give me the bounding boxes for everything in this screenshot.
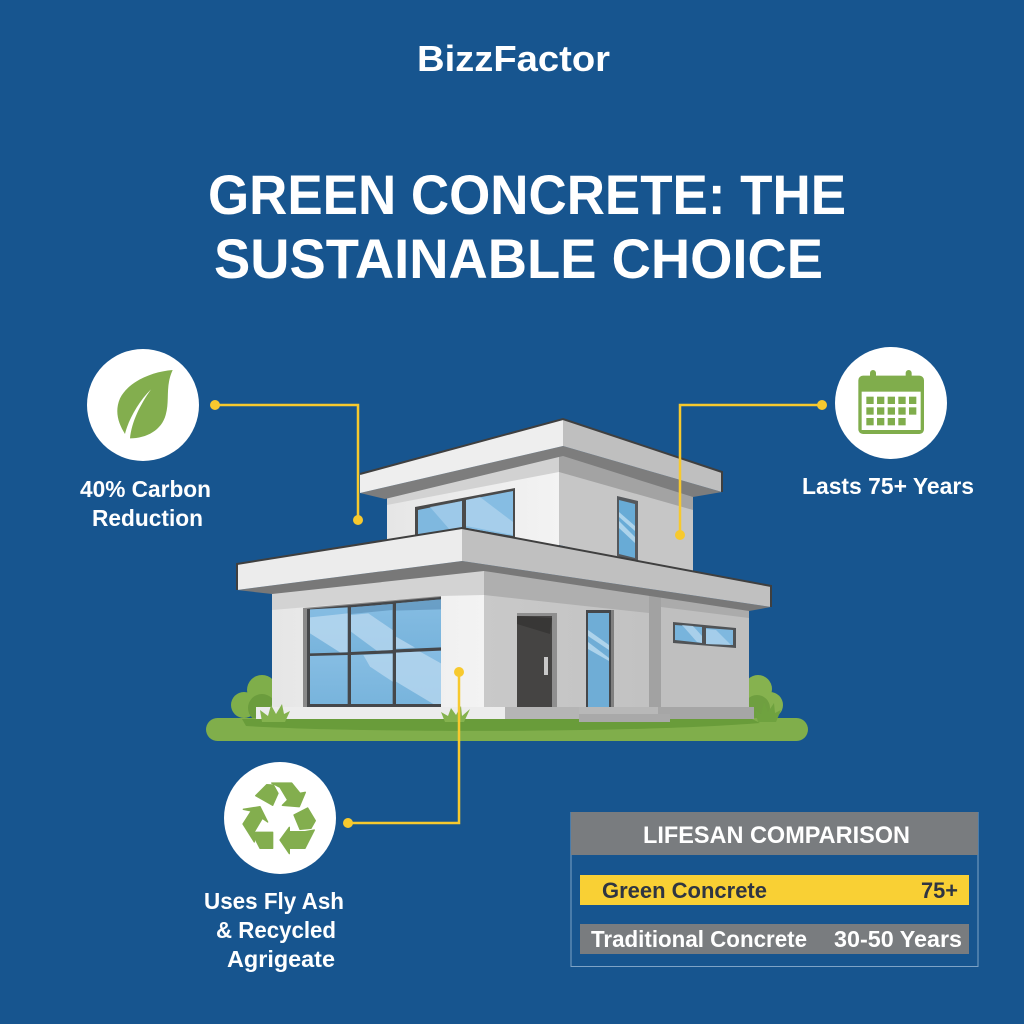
brand logo: BizzFactor xyxy=(417,38,610,79)
large front window xyxy=(303,596,441,707)
label: recycled materials: & Recycled xyxy=(216,917,336,943)
upper left window xyxy=(415,488,515,540)
window panes xyxy=(310,599,441,704)
lower storey walls xyxy=(272,569,749,708)
window reflections xyxy=(310,613,441,704)
grass tufts xyxy=(260,702,781,722)
label: carbon reduction: 40% Carbon xyxy=(80,476,211,502)
callout connector: lifespan xyxy=(675,400,827,540)
tall window xyxy=(586,610,614,708)
callout connector: recycled xyxy=(343,667,464,828)
row: green concrete xyxy=(580,875,969,905)
title xyxy=(208,163,846,290)
front door xyxy=(517,613,557,708)
ground and bushes xyxy=(206,675,808,741)
row: green concrete: 75+ xyxy=(921,878,958,903)
lower roof xyxy=(237,528,771,611)
panel: lifespan comparison xyxy=(571,812,978,966)
small side window xyxy=(673,622,736,648)
label: carbon reduction xyxy=(80,476,211,531)
row: green concrete: Green Concrete xyxy=(602,878,767,903)
callout connector: carbon xyxy=(210,400,363,525)
house illustration xyxy=(206,419,808,741)
panel header xyxy=(571,812,978,855)
label: carbon reduction: Reduction xyxy=(92,505,203,531)
plinth and steps xyxy=(256,707,754,722)
title: GREEN CONCRETE: THE xyxy=(208,163,846,226)
title: SUSTAINABLE CHOICE xyxy=(214,227,823,290)
row: traditional concrete xyxy=(580,924,969,954)
upper right window xyxy=(617,496,638,562)
row: traditional concrete: Traditional Concrete xyxy=(591,926,807,952)
window top shade xyxy=(351,599,441,614)
label: recycled materials: Uses Fly Ash xyxy=(204,888,344,914)
upper storey walls xyxy=(387,448,693,575)
icon: calendar xyxy=(835,347,947,459)
label: recycled materials: Agrigeate xyxy=(227,946,335,972)
row: traditional concrete: 30-50 Years xyxy=(834,926,962,952)
label: lifespan: Lasts 75+ Years xyxy=(802,473,974,499)
icon: recycle xyxy=(224,762,336,874)
panel header: LIFESAN COMPARISON xyxy=(643,822,910,849)
icon: leaf xyxy=(87,349,199,461)
upper roof xyxy=(360,419,722,499)
label: recycled materials xyxy=(204,888,344,972)
